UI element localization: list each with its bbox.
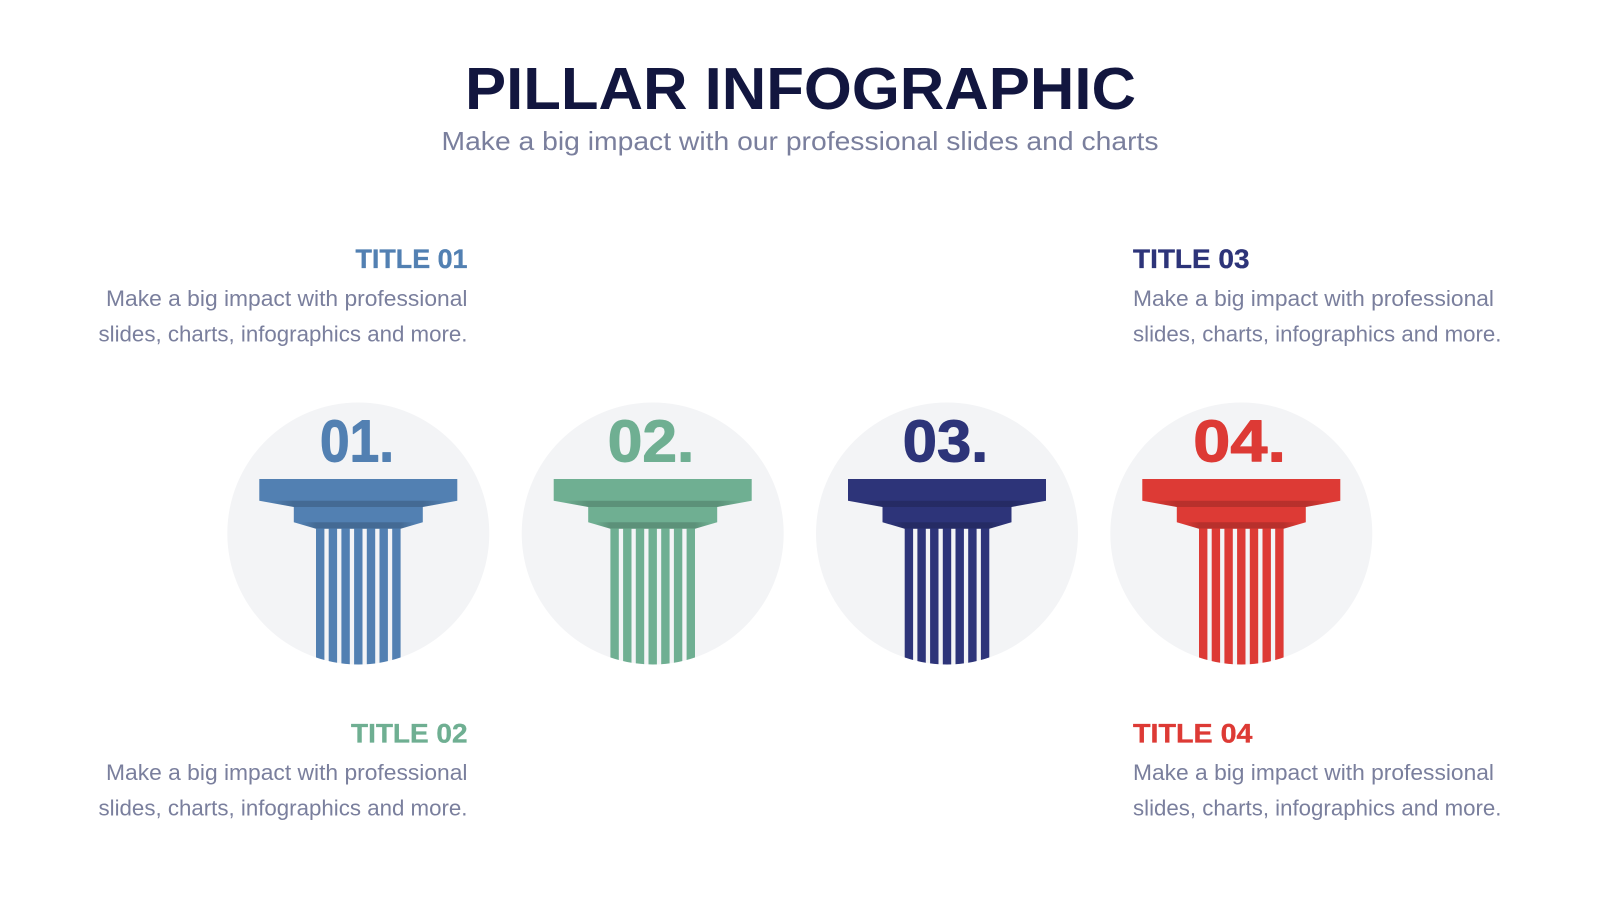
description: title 01: slides, charts, infographics and more. <box>98 322 468 347</box>
heading: title 02: TITLE 02 <box>351 718 468 748</box>
heading: title 03: TITLE 03 <box>1133 244 1250 274</box>
number 04: 04. <box>1193 409 1286 475</box>
description: title 03: Make a big impact with professional <box>1133 286 1494 311</box>
description: title 04 <box>1133 760 1502 821</box>
description: title 02: slides, charts, infographics and more. <box>98 796 468 821</box>
number 03: 03. <box>903 409 988 475</box>
number 02: 02. <box>608 409 694 475</box>
description: title 02: Make a big impact with professional <box>106 760 468 785</box>
description: title 01 <box>98 286 468 347</box>
icon: pillar <box>1142 479 1340 668</box>
description: title 03 <box>1133 286 1502 347</box>
subtitle: Make a big impact with our professional slides and charts <box>442 126 1158 156</box>
panel: title 04 text <box>1133 718 1502 821</box>
background circle <box>227 402 489 664</box>
icon: pillar <box>554 479 752 668</box>
heading: title 01: TITLE 01 <box>356 244 468 274</box>
icon: pillar <box>848 479 1046 668</box>
background circle <box>816 402 1078 664</box>
description: title 02 <box>98 760 468 821</box>
number 01: 01. <box>320 409 394 475</box>
heading: title 04: TITLE 04 <box>1133 718 1252 748</box>
panel: pillar 04 <box>1110 402 1372 668</box>
description: title 01: Make a big impact with professional <box>106 286 468 311</box>
panel: title 03 text <box>1133 244 1502 347</box>
title: PILLAR INFOGRAPHIC <box>465 55 1136 122</box>
panel: title 01 text <box>98 244 468 347</box>
panel: title 02 text <box>98 718 468 821</box>
panel: pillar 02 <box>522 402 784 668</box>
background circle <box>522 402 784 664</box>
description: title 04: slides, charts, infographics and more. <box>1133 796 1502 821</box>
background circle <box>1110 402 1372 664</box>
description: title 04: Make a big impact with professional <box>1133 760 1494 785</box>
panel: pillar 01 <box>227 402 489 668</box>
panel: pillar 03 <box>816 402 1078 668</box>
icon: pillar <box>259 479 457 668</box>
description: title 03: slides, charts, infographics and more. <box>1133 322 1502 347</box>
header <box>442 55 1158 156</box>
